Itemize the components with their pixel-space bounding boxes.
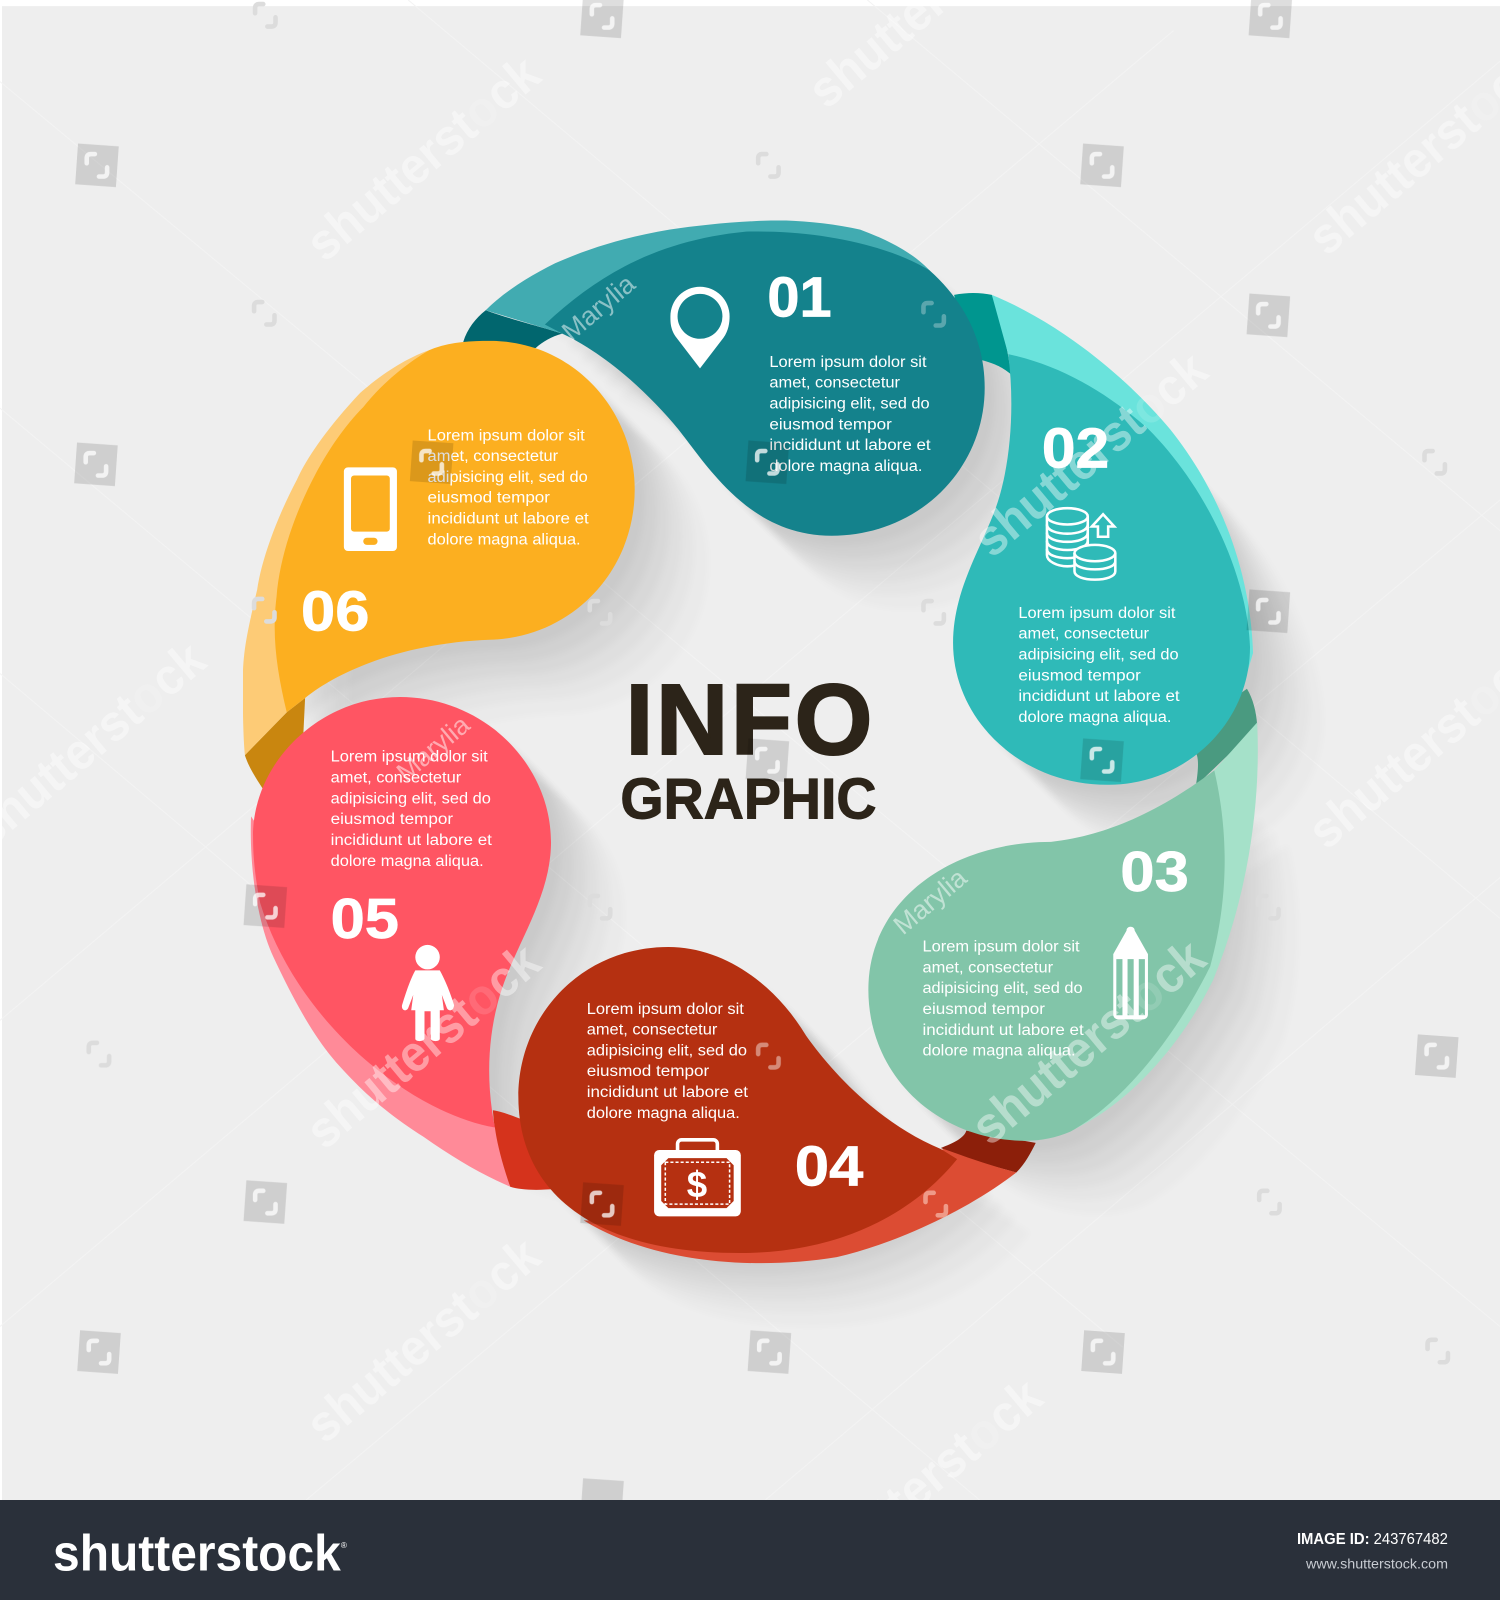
text block 03: amet, consectetur: [922, 959, 1053, 976]
number 01: 01: [767, 265, 832, 328]
footer logo: shutterstock: [53, 1524, 341, 1581]
text block 05: [331, 749, 492, 870]
text block 05: Lorem ipsum dolor sit: [331, 749, 488, 766]
watermarks: Marylia: [888, 862, 973, 940]
text block 05: eiusmod tempor: [331, 811, 453, 828]
ribbon: 06 back strip and fold: [243, 350, 430, 794]
text block 03: adipisicing elit, sed do: [922, 980, 1083, 997]
icon: tablet: [344, 467, 397, 551]
watermarks: shutterstock: [295, 932, 551, 1159]
number 04: 04: [795, 1135, 863, 1198]
watermarks: shutterstock: [295, 1226, 551, 1453]
registered mark: ®: [341, 1541, 347, 1550]
text block 01: [769, 354, 931, 475]
watermarks: Marylia: [556, 268, 641, 346]
text block 06: dolore magna aliqua.: [428, 531, 581, 548]
panel: 04: [518, 947, 957, 1253]
text block 02: dolore magna aliqua.: [1018, 709, 1171, 726]
number 05: 05: [331, 887, 399, 950]
number 06: 06: [301, 580, 369, 643]
text block 06: eiusmod tempor: [428, 490, 550, 507]
number 03: 03: [1120, 840, 1189, 903]
text block 02: adipisicing elit, sed do: [1018, 646, 1179, 663]
ribbon: 03 back strip and fold: [1020, 689, 1258, 1131]
text block 04: eiusmod tempor: [587, 1063, 709, 1080]
title: [620, 664, 877, 831]
text block 02: Lorem ipsum dolor sit: [1018, 605, 1176, 622]
watermarks: shutterstock: [960, 928, 1216, 1155]
text block 05: adipisicing elit, sed do: [331, 790, 491, 807]
watermarks: shutterstock: [962, 340, 1218, 568]
panel: 06: [275, 341, 635, 712]
text block 06: adipisicing elit, sed do: [428, 469, 588, 486]
text block 04: Lorem ipsum dolor sit: [587, 1001, 745, 1018]
icon: map pin: [670, 287, 730, 368]
text block 05: dolore magna aliqua.: [331, 853, 484, 870]
text block 05: incididunt ut labore et: [331, 832, 492, 849]
icon: briefcase: $: [687, 1164, 707, 1205]
text block 04: adipisicing elit, sed do: [587, 1042, 747, 1059]
text block 03: incididunt ut labore et: [922, 1022, 1084, 1039]
panel: 02: [953, 354, 1250, 785]
text block 03: dolore magna aliqua.: [922, 1043, 1076, 1060]
text block 01: dolore magna aliqua.: [769, 458, 922, 475]
image id: IMAGE ID: 243767482: [1297, 1531, 1448, 1548]
panel: 03: [868, 770, 1225, 1141]
text block 02: amet, consectetur: [1018, 626, 1149, 643]
icon: pencil: [1113, 927, 1148, 1019]
watermarks: shutterstock: [797, 1366, 1053, 1594]
number 02: 02: [1042, 416, 1109, 479]
text block 02: incididunt ut labore et: [1018, 688, 1180, 705]
text block 04: incididunt ut labore et: [587, 1084, 749, 1101]
ribbon: 02 back strip and fold: [954, 293, 1253, 673]
ribbon: 05 back strip and fold: [251, 816, 556, 1190]
icon: briefcase: [654, 1140, 741, 1216]
text block 01: amet, consectetur: [769, 375, 900, 392]
text block 05: amet, consectetur: [331, 770, 461, 787]
icon: coins with arrow: [1047, 508, 1115, 580]
text block 06: Lorem ipsum dolor sit: [428, 427, 585, 444]
text block 04: amet, consectetur: [587, 1022, 717, 1039]
text block 06: [428, 427, 589, 548]
long shadows: [263, 242, 1260, 1263]
text block 02: [1018, 605, 1180, 726]
website: www.shutterstock.com: [1305, 1556, 1448, 1572]
text block 03: Lorem ipsum dolor sit: [922, 939, 1080, 956]
text block 04: dolore magna aliqua.: [587, 1105, 740, 1122]
text block 01: eiusmod tempor: [769, 416, 892, 433]
footer bar: [0, 1500, 1500, 1600]
title: INFO: [626, 664, 872, 776]
text block 03: eiusmod tempor: [922, 1001, 1045, 1018]
watermarks: Marylia: [391, 709, 476, 787]
icon: person: [402, 945, 454, 1041]
text block 01: adipisicing elit, sed do: [769, 395, 930, 412]
text block 04: [587, 1001, 749, 1122]
title: GRAPHIC: [620, 767, 877, 831]
watermarks: shutterstock: [295, 44, 551, 272]
panel: 05: [253, 697, 551, 1128]
text block 06: amet, consectetur: [428, 448, 558, 465]
panel: 01: [545, 231, 985, 536]
text block 01: incididunt ut labore et: [769, 437, 931, 454]
ribbon: 01 back strip and fold: [463, 220, 930, 357]
text block 02: eiusmod tempor: [1018, 667, 1141, 684]
ribbon: 04 back strip and fold: [584, 1131, 1036, 1263]
text block 01: Lorem ipsum dolor sit: [769, 354, 927, 371]
text block 03: [922, 939, 1084, 1060]
text block 06: incididunt ut labore et: [428, 511, 589, 528]
